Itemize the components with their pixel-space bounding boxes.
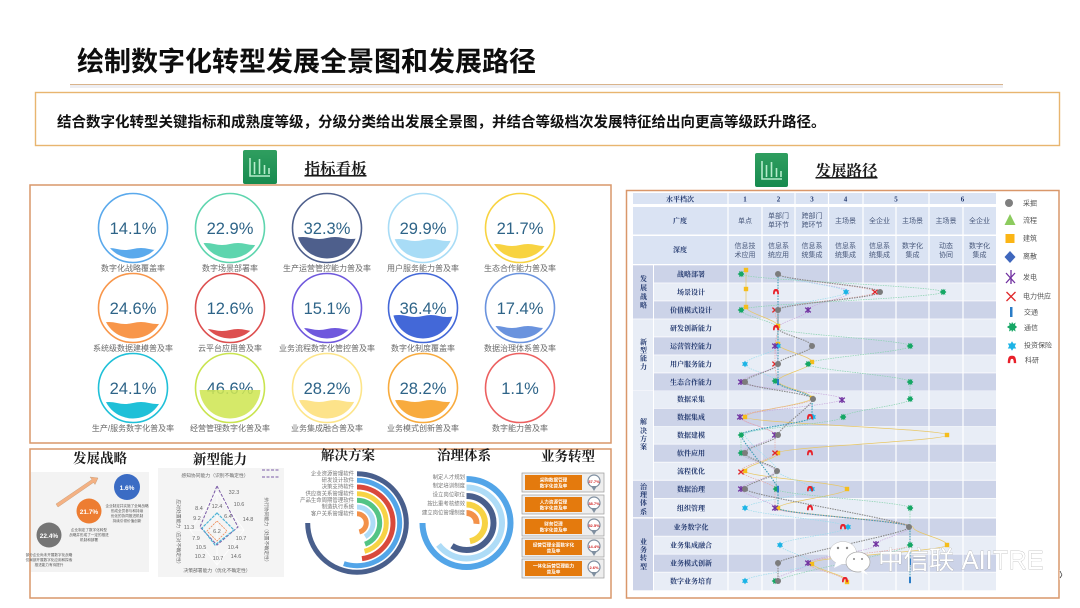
table header: 跨环节 xyxy=(802,220,822,229)
legend: 建筑: 建筑 xyxy=(1023,234,1037,242)
table header: 单部门 xyxy=(768,211,789,220)
table categories: 务 xyxy=(640,545,647,554)
table header: 动态 xyxy=(939,241,953,250)
gauge: 云平台应用普及率 xyxy=(196,274,264,353)
table header: 信息系 xyxy=(802,241,822,250)
table categories: 转 xyxy=(640,553,647,562)
table header: 主场景 xyxy=(835,216,856,225)
item: 财务管理: 数字化普及率 xyxy=(540,526,568,534)
watermark: brand text: 中信联 AIITRE xyxy=(878,547,1044,575)
line: 采掘 xyxy=(745,274,910,581)
table categories: 理 xyxy=(640,490,647,499)
table header: 3 xyxy=(810,196,814,204)
table header: 统集成 xyxy=(835,250,856,259)
radar series: outer xyxy=(200,486,238,545)
radar values: 10.6 xyxy=(234,502,244,508)
table categories: 方 xyxy=(640,434,647,443)
gauge: 生产/服务数字化普及率 xyxy=(92,354,174,433)
table header: 单点 xyxy=(738,216,752,225)
note: high stage: 持续引领价值创新 xyxy=(113,518,142,523)
radar values: 11.3 xyxy=(184,525,194,531)
legend: 投资保险: 投资保险 xyxy=(1024,340,1052,350)
legend: 流程 xyxy=(1004,214,1037,225)
item: 采购数据管理: 数字化普及率 xyxy=(540,482,568,490)
gauge: 业务流程数字化管控普及率 xyxy=(279,274,375,353)
item: 采购数据管理 xyxy=(522,473,604,492)
item: 一体化运营管理能力 xyxy=(522,559,604,578)
item: 经营管理全面数字化 xyxy=(522,538,604,557)
table header: 广度 xyxy=(673,216,687,225)
table row labels: 业务集成融合 xyxy=(670,540,712,550)
gauge: 数字能力普及率: 1.1% xyxy=(501,380,539,398)
note: high stage: 形成全员参与和持续 xyxy=(111,508,144,513)
heading: 指标看板: 指标看板 xyxy=(304,159,367,178)
gauge: 数字场景部署率: 数字场景部署率 xyxy=(202,263,258,273)
solution labels: 企业资源管理软件 xyxy=(311,470,355,478)
solution labels: 研发设计软件 xyxy=(322,476,355,484)
gauge: 生产/服务数字化普及率: 24.1% xyxy=(110,380,157,398)
note: low stage: 部分企业尚未开展数字化战略 xyxy=(26,552,73,557)
table header: 单环节 xyxy=(768,220,789,229)
gauge: 业务集成融合普及率: 28.2% xyxy=(304,380,351,398)
item: 采购数据管理: 采购数据管理 xyxy=(540,476,568,484)
legend: 离散: 离散 xyxy=(1023,252,1037,260)
gauge: 数字化制度覆盖率: 数字化制度覆盖率 xyxy=(391,343,455,353)
legend: 交通 xyxy=(1010,307,1038,317)
legend: 流程: 流程 xyxy=(1023,216,1037,224)
icon: dashboard chart left xyxy=(243,150,277,184)
table row labels: 研发创新能力 xyxy=(670,324,712,332)
legend: 采掘: 采掘 xyxy=(1023,198,1037,208)
gauge: 经营管理数字化普及率 xyxy=(190,354,270,433)
table categories: 展 xyxy=(640,283,647,292)
strategy chart xyxy=(26,472,149,572)
heading: 发展战略: 发展战略 xyxy=(73,450,127,466)
radar series: inner xyxy=(207,521,227,541)
callout: intro box xyxy=(36,92,1060,146)
table categories: 新 xyxy=(640,338,647,346)
gauge: 业务集成融合普及率: 业务集成融合普及率 xyxy=(291,423,363,433)
item: 一体化运营管理能力: 2.6% xyxy=(589,565,599,570)
table row labels: 价值模式设计 xyxy=(670,306,712,314)
radial bar chart: solutions xyxy=(300,470,406,572)
table header: 数字化 xyxy=(969,241,990,250)
line: 建筑 xyxy=(745,270,947,581)
gauge: 生产运营管控能力普及率: 生产运营管控能力普及率 xyxy=(283,263,371,273)
legend: 电力供应: 电力供应 xyxy=(1023,292,1051,300)
radar values: 12.4 xyxy=(212,504,222,510)
gauge: 数据治理体系普及率: 数据治理体系普及率 xyxy=(484,343,556,353)
heading: 解决方案: 解决方案 xyxy=(321,447,375,463)
radar values: 10.7 xyxy=(213,556,223,562)
table header: 协同 xyxy=(939,250,953,259)
radar values: 6.4 xyxy=(224,514,232,520)
gauge: 数据治理体系普及率: 17.4% xyxy=(497,300,544,318)
table header xyxy=(666,194,990,259)
gauge: 数字能力普及率: 数字能力普及率 xyxy=(492,423,548,433)
icon: dashboard chart right xyxy=(755,153,788,187)
gauge: 生态合作能力普及率: 生态合作能力普及率 xyxy=(484,263,556,273)
line: 电力供应 xyxy=(741,274,910,581)
table row labels: 流程优化 xyxy=(677,466,705,476)
title: 绘制数字化转型发展全景图和发展路径 xyxy=(77,47,536,77)
note: mid stage: 战略并形成了一定的推进 xyxy=(69,532,109,537)
radar chart xyxy=(158,468,284,577)
axis label right: 执行协同能力（处置不确定性） xyxy=(263,497,270,565)
table row labels: 业务数字化 xyxy=(674,522,708,532)
table categories: 案 xyxy=(640,442,647,451)
radar values: 10.2 xyxy=(195,554,205,560)
solution labels xyxy=(300,470,355,518)
solution labels: 产品生命周期管理软件 xyxy=(300,496,355,504)
gauge: 数据治理体系普及率 xyxy=(484,274,556,353)
line: 交通 xyxy=(741,274,910,581)
table header: 集成 xyxy=(972,250,986,259)
gauge: 业务模式创新普及率: 业务模式创新普及率 xyxy=(387,423,459,433)
axis label bottom: 决策部署能力（优化不确定性） xyxy=(183,567,251,574)
legend: 发电 xyxy=(1006,270,1037,284)
radar values: 14.8 xyxy=(243,517,253,523)
gauge: 用户服务能力普及率 xyxy=(387,194,459,273)
governance labels: 设立岗位职位 xyxy=(433,490,466,498)
axis label left: 应对处置能力（应对不确定性） xyxy=(175,499,182,567)
table row labels: 软件应用 xyxy=(677,448,705,458)
table row labels: 组织管理 xyxy=(677,504,705,512)
gauge: 生产运营管控能力普及率 xyxy=(283,194,371,273)
radar values: 7.9 xyxy=(192,536,200,542)
table header: 术应用 xyxy=(734,250,756,259)
gauge: 经营管理数字化普及率: 经营管理数字化普及率 xyxy=(190,423,270,433)
stray edge glyph xyxy=(1060,570,1062,580)
table row labels: 数据采集 xyxy=(677,394,705,404)
table header: 主场景 xyxy=(902,216,923,225)
radial bar chart: governance xyxy=(422,473,510,567)
item: 经营管理全面数字化: 14.4% xyxy=(588,544,600,549)
note: low stage: 仅局部开展数字化应用和探索 xyxy=(26,557,73,562)
table row labels: 数据集成 xyxy=(677,412,705,422)
governance labels xyxy=(422,473,466,516)
table row labels: 数据建模 xyxy=(677,430,705,440)
circle: 1.6%: 1.6% xyxy=(120,485,135,492)
gauge: 数字化战略覆盖率: 数字化战略覆盖率 xyxy=(101,263,165,273)
legend: 离散 xyxy=(1004,251,1037,263)
legend: 通信: 通信 xyxy=(1024,323,1038,332)
table row labels: 业务模式创新 xyxy=(670,558,712,568)
radar values: 32.3 xyxy=(229,490,239,496)
item: 一体化运营管理能力: 普及率 xyxy=(547,568,561,576)
item: 经营管理全面数字化: 普及率 xyxy=(547,548,561,554)
item: 人力资源管理: 数字化普及率 xyxy=(540,504,568,512)
solution labels: 供应商关系管理软件 xyxy=(305,490,355,498)
legend xyxy=(1004,198,1052,364)
radar values: 9.2 xyxy=(193,516,201,522)
gauge: 数字化制度覆盖率: 36.4% xyxy=(400,300,447,318)
radar legend xyxy=(262,470,279,477)
table categories: 能 xyxy=(640,354,647,362)
radar values: 10.4 xyxy=(228,545,238,551)
table categories: 解 xyxy=(640,417,647,426)
table header: 6 xyxy=(961,196,965,204)
gauge: 生产/服务数字化普及率: 生产/服务数字化普及率 xyxy=(92,423,174,433)
gauge: 系统级数据建模普及率: 系统级数据建模普及率 xyxy=(93,343,173,353)
panel: development path xyxy=(626,190,1059,598)
gauge: 生态合作能力普及率 xyxy=(484,194,556,273)
governance labels: 制定人才规划 xyxy=(433,473,465,481)
list: business transformation xyxy=(522,473,604,578)
axis label top: 感知协同能力（识别不确定性） xyxy=(181,472,249,479)
table header: 信息系 xyxy=(835,241,856,250)
circle: 21.7%: 21.7% xyxy=(80,509,98,516)
legend: 投资保险 xyxy=(1008,340,1052,351)
watermark: WeChat logo xyxy=(830,542,870,575)
gauge: 业务集成融合普及率 xyxy=(291,354,363,433)
gauge: 数字场景部署率 xyxy=(196,194,264,273)
legend: 采掘 xyxy=(1005,198,1037,208)
gauge: 数字化战略覆盖率: 14.1% xyxy=(110,220,157,238)
legend: 通信 xyxy=(1007,322,1038,332)
legend: 发电: 发电 xyxy=(1023,272,1037,282)
gauge: 云平台应用普及率: 云平台应用普及率 xyxy=(198,343,262,353)
item: 财务管理: 52.5% xyxy=(588,523,600,528)
note: high stage: 优化的协同推进机制 xyxy=(111,513,144,518)
path lines xyxy=(740,270,947,581)
radar values: 8.4 xyxy=(195,506,203,512)
table row labels: 用户服务能力 xyxy=(670,360,712,368)
table categories: 略 xyxy=(640,300,647,310)
table header: 集成 xyxy=(906,250,920,259)
table row labels: 数据治理 xyxy=(677,484,705,494)
table row labels: 运营管控能力 xyxy=(670,342,712,350)
item: 经营管理全面数字化: 经营管理全面数字化 xyxy=(533,542,575,548)
table categories: 系 xyxy=(640,507,648,516)
note: high stage: 企业制定并实施了全局战略 xyxy=(105,503,149,508)
heading: 业务转型: 业务转型 xyxy=(541,448,595,464)
note: mid stage: 企业制定了数字化转型 xyxy=(71,527,107,532)
note: low stage: 推进能力有待提升 xyxy=(35,562,64,567)
table header: 5 xyxy=(894,196,898,204)
line: 发电 xyxy=(740,274,910,581)
gauge: 云平台应用普及率: 12.6% xyxy=(207,300,254,318)
gauge: 用户服务能力普及率: 29.9% xyxy=(400,220,447,238)
arrow: growth xyxy=(56,477,98,507)
gauge: 用户服务能力普及率: 用户服务能力普及率 xyxy=(387,263,459,273)
table categories: 发 xyxy=(640,274,647,283)
radar series: middle xyxy=(202,513,234,545)
legend: 电力供应 xyxy=(1006,292,1051,301)
table background xyxy=(633,193,996,590)
governance labels: 建立岗位管理制度 xyxy=(422,508,466,516)
table header: 1 xyxy=(743,196,747,204)
gauge: 数字化制度覆盖率 xyxy=(388,274,458,353)
table row labels xyxy=(670,270,712,586)
table categories: 体 xyxy=(640,498,647,507)
radar values: 10.7 xyxy=(236,536,246,542)
legend: 交通: 交通 xyxy=(1024,308,1038,316)
gauge: 业务流程数字化管控普及率: 15.1% xyxy=(304,300,351,318)
panel: five dimension details xyxy=(26,447,611,598)
title rule xyxy=(70,84,1003,88)
solution labels: 决策支持软件 xyxy=(322,483,355,491)
table header: 深度 xyxy=(673,245,687,254)
table categories: 型 xyxy=(640,346,647,354)
legend: 科研: 科研 xyxy=(1025,356,1039,364)
gauge: 生产运营管控能力普及率: 32.3% xyxy=(304,220,351,238)
table header: 信息技 xyxy=(734,241,756,250)
gauge: 系统级数据建模普及率 xyxy=(93,274,173,353)
solution labels: 客户关系管理软件 xyxy=(311,510,355,518)
callout: intro box: 结合数字化转型关键指标和成熟度等级，分级分类给出发展全景图，并结合等级档次发展特征给出向更高等级跃升路径。 xyxy=(57,113,826,131)
legend: 科研 xyxy=(1008,356,1039,364)
item: 人力资源管理: 38.7% xyxy=(588,501,600,506)
table header: 信息系 xyxy=(768,241,789,250)
table header: 统集成 xyxy=(802,250,822,259)
radar values: 6.2 xyxy=(213,529,221,535)
governance labels: 制定培训制度 xyxy=(433,482,466,490)
solution labels: 制造执行系统 xyxy=(322,503,355,511)
table categories xyxy=(640,274,648,571)
item: 人力资源管理: 人力资源管理 xyxy=(540,498,568,506)
radar values xyxy=(184,490,253,562)
gauge: 数字化战略覆盖率 xyxy=(98,194,168,273)
line: 通信 xyxy=(741,274,943,581)
item: 人力资源管理 xyxy=(522,495,604,514)
item: 一体化运营管理能力: 一体化运营管理能力 xyxy=(533,562,575,570)
table categories: 治 xyxy=(640,482,648,491)
item: 财务管理 xyxy=(522,517,604,536)
table header: 2 xyxy=(777,196,781,204)
table header: 主场景 xyxy=(936,216,956,225)
table header: 4 xyxy=(844,196,848,204)
table row labels: 数字业务培育 xyxy=(670,576,712,586)
heading: 发展路径: 发展路径 xyxy=(815,162,878,180)
gauge: 业务流程数字化管控普及率: 业务流程数字化管控普及率 xyxy=(279,343,375,353)
table row labels: 场景设计 xyxy=(677,288,705,296)
table categories: 型 xyxy=(640,562,647,571)
legend: 建筑 xyxy=(1006,234,1037,243)
table header: 跨部门 xyxy=(802,211,822,220)
table categories: 业 xyxy=(640,537,647,546)
governance labels: 按比重考核绩效 xyxy=(427,500,466,508)
item: 财务管理: 财务管理 xyxy=(544,520,563,528)
gauge: 系统级数据建模普及率: 24.6% xyxy=(110,300,157,318)
table header: 全企业 xyxy=(969,216,990,225)
radar values: 14.6 xyxy=(231,554,241,560)
table categories: 决 xyxy=(640,426,647,435)
gauge: 业务模式创新普及率: 28.2% xyxy=(400,380,447,398)
gauge: 业务模式创新普及率 xyxy=(387,354,459,433)
table categories: 力 xyxy=(640,362,647,371)
path markers xyxy=(737,268,949,584)
gauge: 生态合作能力普及率: 21.7% xyxy=(497,220,544,238)
table header: 信息系 xyxy=(869,241,890,250)
heading: 治理体系: 治理体系 xyxy=(437,447,491,463)
note: mid stage: 机制和部署 xyxy=(80,537,98,542)
table row labels: 生态合作能力 xyxy=(670,378,712,386)
table row labels: 战略部署 xyxy=(677,270,705,278)
table header: 水平档次 xyxy=(666,194,694,204)
table header: 数字化 xyxy=(902,241,923,250)
table header: 统集成 xyxy=(869,250,890,259)
radar values: 10.5 xyxy=(196,545,206,551)
table header: 统应用 xyxy=(768,250,789,259)
line: 投资保险 xyxy=(745,274,848,581)
gauge: 经营管理数字化普及率: 46.6% xyxy=(207,380,254,398)
circle: 22.4%: 22.4% xyxy=(40,533,58,540)
heading: 新型能力: 新型能力 xyxy=(193,451,247,467)
table header: 全企业 xyxy=(869,216,890,225)
table categories: 战 xyxy=(640,292,647,301)
gauge: 数字场景部署率: 22.9% xyxy=(207,220,254,238)
panel: indicator dashboard xyxy=(30,185,611,443)
item: 采购数据管理: 37.7% xyxy=(588,479,600,484)
gauge: 数字能力普及率 xyxy=(486,354,554,433)
